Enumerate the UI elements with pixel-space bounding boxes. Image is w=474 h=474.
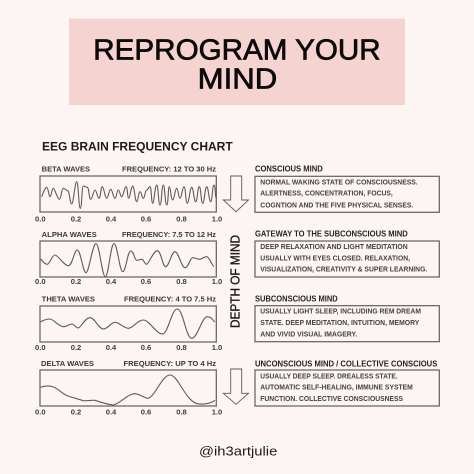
chart: theta waves: 0.8 bbox=[176, 343, 187, 352]
panel: gateway to the subconscious mind bbox=[255, 230, 439, 277]
chart: delta waves: 0.2 bbox=[71, 408, 81, 417]
panel: gateway to the subconscious mind: USUALLY WITH EYES CLOSED. RELAXATION, bbox=[260, 253, 410, 262]
panel: subconscious mind: AND VIVID VISUAL IMAGERY. bbox=[260, 329, 357, 338]
chart: beta waves: 0.6 bbox=[141, 215, 151, 224]
chart: beta waves: FREQUENCY: 12 TO 30 Hz bbox=[122, 165, 216, 174]
chart: beta waves: BETA WAVES bbox=[42, 165, 90, 174]
panel: subconscious mind: STATE. DEEP MEDITATION, INTUITION, MEMORY bbox=[260, 318, 419, 327]
panel: unconscious mind bbox=[255, 360, 439, 406]
panel: unconscious mind: USUALLY DEEP SLEEP. DREALESS STATE. bbox=[260, 371, 398, 380]
chart: beta waves: 0.4 bbox=[106, 215, 117, 224]
chart: theta waves: 1.0 bbox=[212, 343, 222, 352]
panel: gateway to the subconscious mind: GATEWAY TO THE SUBCONSCIOUS MIND bbox=[255, 230, 408, 239]
title banner bbox=[69, 18, 405, 105]
panel: conscious mind: ALERTNESS, CONCENTRATION, FOCUS, bbox=[260, 189, 393, 198]
chart: theta waves: FREQUENCY: 4 TO 7.5 Hz bbox=[124, 295, 216, 304]
chart: theta waves: 0.0 bbox=[35, 343, 46, 352]
chart: delta waves: 0.6 bbox=[141, 408, 151, 417]
chart: theta waves: THETA WAVES bbox=[42, 295, 95, 304]
chart: theta waves: 0.4 bbox=[106, 343, 117, 352]
chart: theta waves: 0.2 bbox=[71, 343, 81, 352]
panel: conscious mind: NORMAL WAKING STATE OF CONSCIOUSNESS. bbox=[260, 177, 418, 186]
panel: subconscious mind: USUALLY LIGHT SLEEP, INCLUDING REM DREAM bbox=[260, 307, 421, 316]
chart: beta waves: 0.0 bbox=[35, 215, 46, 224]
chart: beta waves: 0.2 bbox=[71, 215, 81, 224]
chart: alpha waves: 1.0 bbox=[212, 277, 222, 286]
chart: beta waves bbox=[35, 165, 222, 224]
chart: delta waves: 0.0 bbox=[35, 408, 46, 417]
panel: unconscious mind: UNCONSCIOUS MIND / COLLECTIVE CONSCIOUS bbox=[255, 360, 438, 369]
arrow: bottom down arrow bbox=[223, 369, 248, 404]
chart: delta waves: FREQUENCY: UP TO 4 Hz bbox=[124, 359, 216, 368]
chart: alpha waves: 0.0 bbox=[35, 277, 46, 286]
chart: theta waves: 0.6 bbox=[141, 343, 151, 352]
title banner: REPROGRAM YOUR bbox=[93, 34, 381, 66]
chart: alpha waves: 0.2 bbox=[71, 277, 81, 286]
chart: theta waves bbox=[35, 295, 222, 352]
chart: delta waves bbox=[35, 359, 222, 417]
chart: alpha waves bbox=[35, 230, 222, 286]
panel: conscious mind: COGNTION AND THE FIVE PHYSICAL SENSES. bbox=[260, 200, 413, 209]
panel: gateway to the subconscious mind: DEEP RELAXATION AND LIGHT MEDITATION bbox=[260, 242, 408, 251]
panel: conscious mind: CONSCIOUS MIND bbox=[255, 165, 323, 174]
title banner: MIND bbox=[198, 63, 277, 95]
chart: delta waves: 0.8 bbox=[176, 408, 187, 417]
panel: subconscious mind bbox=[255, 295, 439, 342]
panel: subconscious mind: SUBCONSCIOUS MIND bbox=[255, 295, 338, 304]
chart: delta waves: DELTA WAVES bbox=[41, 359, 94, 368]
chart heading: EEG BRAIN FREQUENCY CHART bbox=[42, 140, 233, 154]
chart: alpha waves: 0.6 bbox=[141, 277, 151, 286]
chart: alpha waves: FREQUENCY: 7.5 TO 12 Hz bbox=[122, 230, 216, 239]
chart: delta waves: 1.0 bbox=[212, 408, 222, 417]
footer handle: @ih3artjulie bbox=[199, 443, 277, 458]
chart: beta waves: 0.8 bbox=[176, 215, 187, 224]
chart: alpha waves: ALPHA WAVES bbox=[42, 230, 97, 239]
panel: unconscious mind: AUTOMATIC SELF-HEALING, IMMUNE SYSTEM bbox=[260, 383, 413, 392]
arrow: top down arrow bbox=[223, 176, 248, 212]
chart: alpha waves: 0.8 bbox=[176, 277, 187, 286]
chart: alpha waves: 0.4 bbox=[106, 277, 117, 286]
panel: unconscious mind: FUNCTION. COLLECTIVE CONSCIOUSNESS bbox=[260, 394, 403, 403]
vertical label: depth of mind: DEPTH OF MIND bbox=[228, 235, 242, 328]
chart: delta waves: 0.4 bbox=[106, 408, 117, 417]
panel: conscious mind bbox=[255, 165, 439, 212]
panel: gateway to the subconscious mind: VISUALIZATION, CREATIVITY & SUPER LEARNING. bbox=[260, 265, 427, 274]
chart: beta waves: 1.0 bbox=[212, 215, 222, 224]
